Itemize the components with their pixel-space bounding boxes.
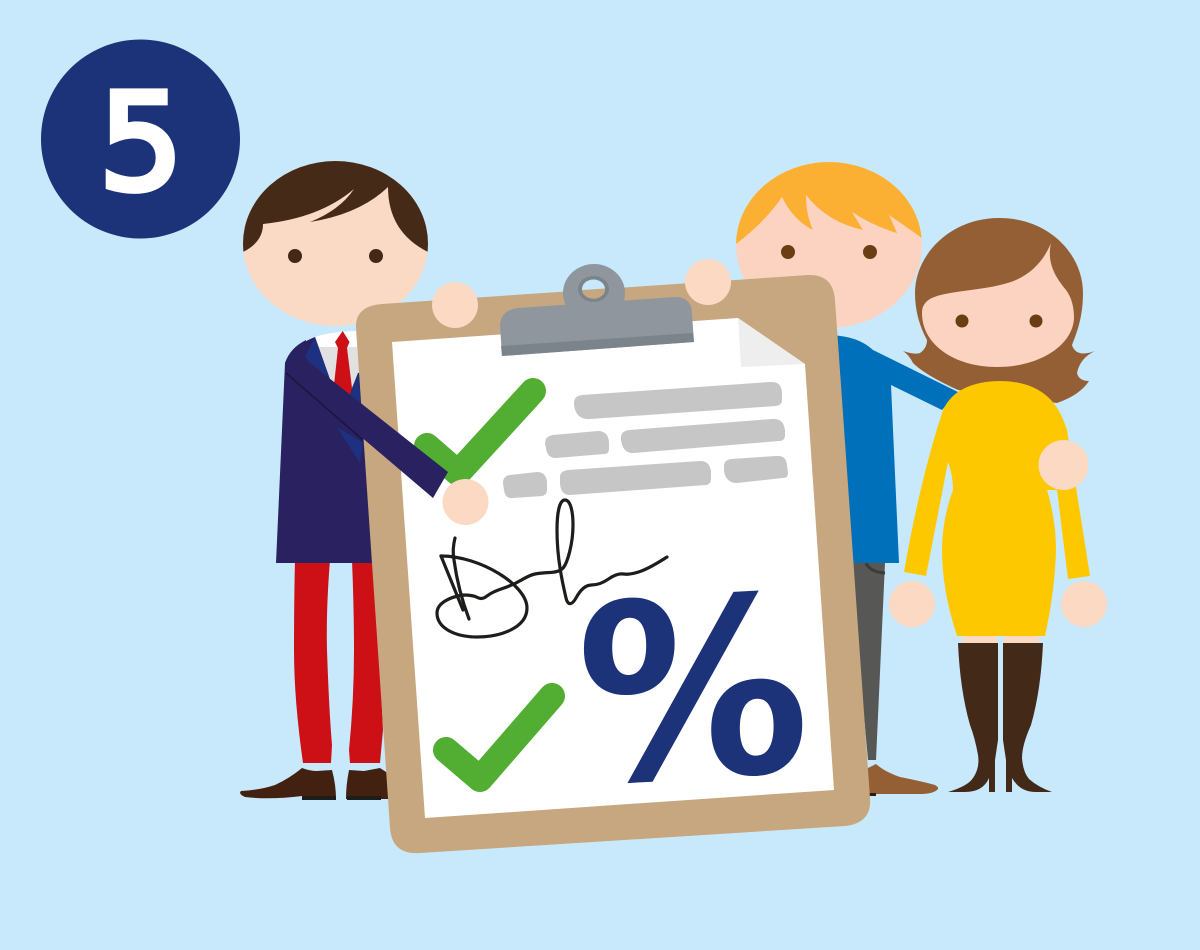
figure: man in navy suit (235, 150, 435, 800)
number badge (41, 40, 240, 238)
hair (903, 218, 1095, 403)
percent sign: % (576, 543, 810, 841)
suit sleeve (285, 340, 448, 498)
shirt front (318, 347, 362, 410)
figure: man in blue top with blond hair (730, 150, 958, 796)
figure: woman in yellow dress (889, 218, 1107, 792)
hands holding clipboard (432, 259, 731, 525)
infographic scene (41, 40, 1107, 854)
left boot (948, 643, 998, 792)
signature (437, 500, 667, 637)
badge numeral: 5 (98, 65, 184, 221)
suit jacket (276, 337, 372, 563)
metal clip (500, 297, 694, 356)
soles (302, 796, 381, 800)
clip ring (563, 264, 625, 322)
shoe sole (868, 793, 876, 796)
red tie (334, 331, 352, 398)
paper sheet (392, 318, 834, 818)
shoe (860, 764, 938, 794)
dark hair (243, 161, 428, 252)
yellow dress (904, 381, 1090, 636)
head (736, 162, 922, 328)
eyes (288, 249, 383, 263)
legs (962, 634, 1039, 644)
clipboard (356, 264, 870, 853)
right shoe (346, 768, 392, 799)
head (243, 161, 428, 326)
board (356, 275, 870, 853)
eyes (956, 314, 1042, 328)
red trousers (294, 560, 383, 763)
text placeholder bars (503, 382, 788, 498)
right boot (1003, 643, 1052, 792)
blond hair (736, 162, 922, 244)
clip shadow stripe (501, 333, 694, 356)
face (922, 243, 1074, 367)
shirt (315, 331, 375, 400)
blue top and arm (830, 335, 958, 563)
jacket lapels (305, 337, 363, 463)
eyes (781, 245, 877, 259)
trousers (850, 563, 885, 760)
trouser pocket (866, 563, 885, 573)
left shoe (240, 768, 336, 799)
sleeve crease (286, 373, 363, 440)
paper fold (738, 318, 805, 367)
hands (889, 440, 1107, 627)
check mark: top (427, 391, 533, 473)
check mark: bottom (446, 696, 552, 779)
